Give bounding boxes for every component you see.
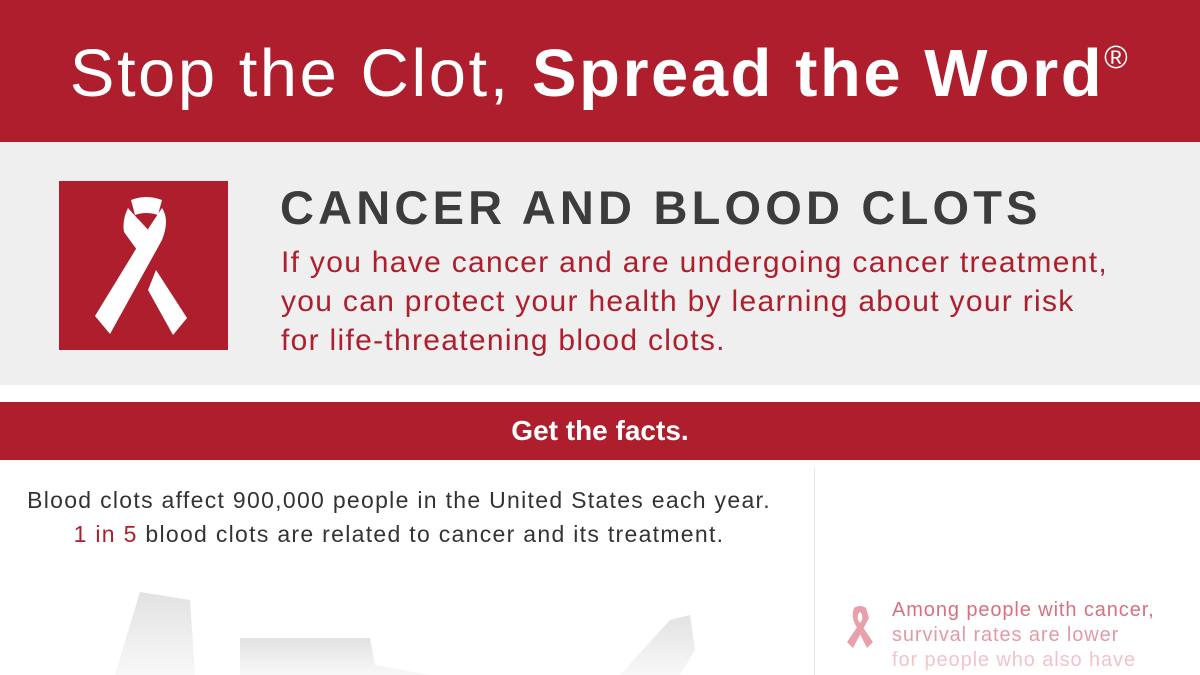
divider [814,468,815,675]
intro text: If you have cancer and are undergoing cancer treatment, [281,246,1108,279]
icon: small pink ribbon [847,606,873,648]
faded US map with 1 in 5 [117,592,695,674]
header band [0,0,1200,142]
section header: get the facts [0,402,1200,460]
intro text: for life-threatening blood clots. [281,324,726,357]
section header: get the facts: Get the facts. [511,415,689,446]
intro text [281,246,1108,357]
intro panel [0,142,1200,385]
heading: CANCER AND BLOOD CLOTS [280,181,1042,234]
intro text: you can protect your health by learning about your risk [281,285,1075,318]
callout: survival rates [847,599,1155,671]
callout text [892,599,1155,671]
icon: ribbon [59,181,228,350]
callout text: Among people with cancer, [892,599,1155,621]
title: Stop the Clot, Spread the Word® [70,36,1130,111]
fact text [27,487,771,547]
fact text: 1 in 5 blood clots are related to cancer and its treatment. [74,521,724,547]
fact text: Blood clots affect 900,000 people in the United States each year. [27,487,771,513]
callout text: survival rates are lower [892,624,1119,646]
callout text: for people who also have [892,649,1136,671]
